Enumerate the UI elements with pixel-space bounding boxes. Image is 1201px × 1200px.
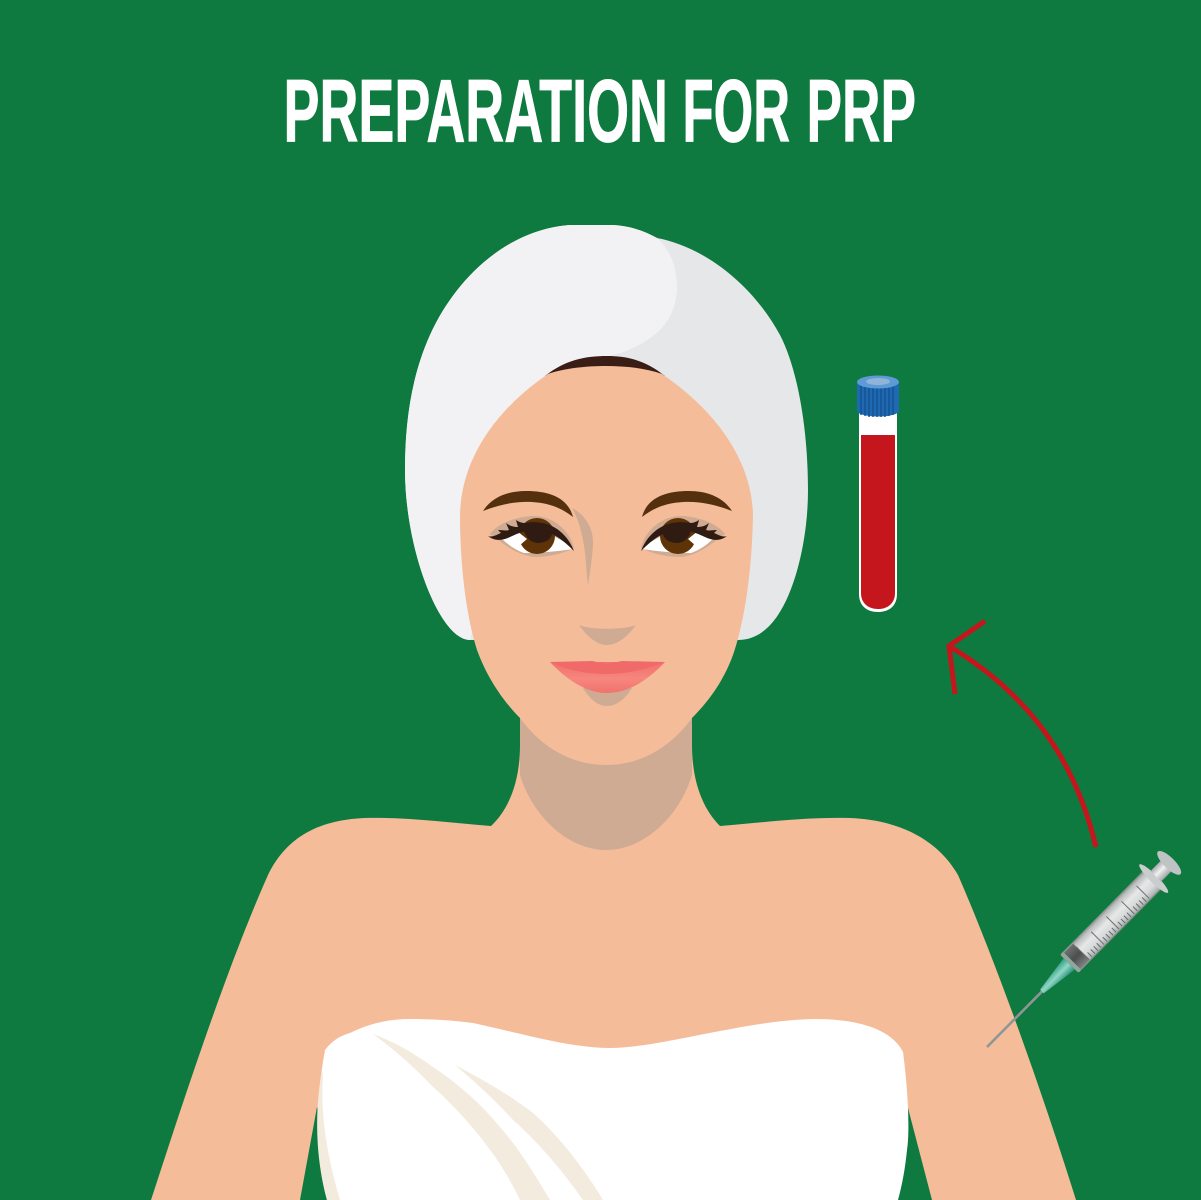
cap ridges <box>861 386 893 417</box>
lower lip shadow <box>583 688 632 706</box>
tube body <box>859 412 897 612</box>
figure: woman with towel <box>151 225 1076 1200</box>
hair line <box>545 356 665 376</box>
plunger rod <box>1150 859 1173 882</box>
icon: blood test tube <box>857 376 899 612</box>
needle <box>986 988 1046 1048</box>
cap opening <box>866 378 890 385</box>
eye shadow <box>641 516 725 557</box>
long scale marks <box>1076 886 1149 959</box>
eye shadow <box>490 516 574 557</box>
arrow: syringe to tube <box>949 621 1096 847</box>
right armpit gap <box>890 1108 932 1200</box>
upper lip <box>550 661 665 674</box>
title: PRP <box>806 60 916 160</box>
left eyebrow <box>483 491 573 517</box>
rubber stopper <box>1064 944 1089 969</box>
title: FOR <box>682 60 790 160</box>
left eye <box>488 516 574 557</box>
neck shadow <box>520 715 692 850</box>
plunger cap <box>1154 848 1184 878</box>
title: PREPARATION <box>284 60 668 160</box>
barrel <box>1061 869 1163 972</box>
iris notch <box>688 531 698 546</box>
towel wrap <box>318 1019 908 1200</box>
arrow shaft <box>949 646 1096 847</box>
blood <box>861 435 895 609</box>
head towel <box>405 225 808 640</box>
needle hub <box>1036 958 1075 997</box>
pupil <box>523 527 553 543</box>
towel fold <box>373 1034 550 1200</box>
right eyebrow <box>642 491 732 517</box>
iris notch <box>517 531 527 546</box>
nose shadow <box>579 625 636 645</box>
flange <box>1137 862 1171 895</box>
lower lip <box>550 662 665 693</box>
pupil <box>662 527 692 543</box>
eye white <box>500 531 573 553</box>
iris <box>519 518 555 554</box>
towel front wrap <box>405 225 677 640</box>
arrow head <box>949 621 985 694</box>
icon: syringe <box>973 845 1187 1061</box>
face <box>460 366 753 765</box>
towel back fold <box>405 225 808 640</box>
iris <box>660 518 696 554</box>
towel fold <box>455 1065 603 1200</box>
upper lid and lashes <box>488 520 574 551</box>
barrel tip <box>1060 952 1081 973</box>
body and shoulders <box>151 700 1076 1200</box>
left armpit gap <box>300 1107 340 1200</box>
scale marks <box>1088 897 1146 957</box>
towel edge fold <box>317 1070 340 1200</box>
blue cap <box>857 382 899 416</box>
right eye <box>641 516 727 557</box>
nose bridge shadow <box>572 508 593 585</box>
body towel <box>317 1019 908 1200</box>
eye white <box>642 531 715 553</box>
upper lid and lashes <box>641 520 727 551</box>
cap top <box>857 376 899 388</box>
